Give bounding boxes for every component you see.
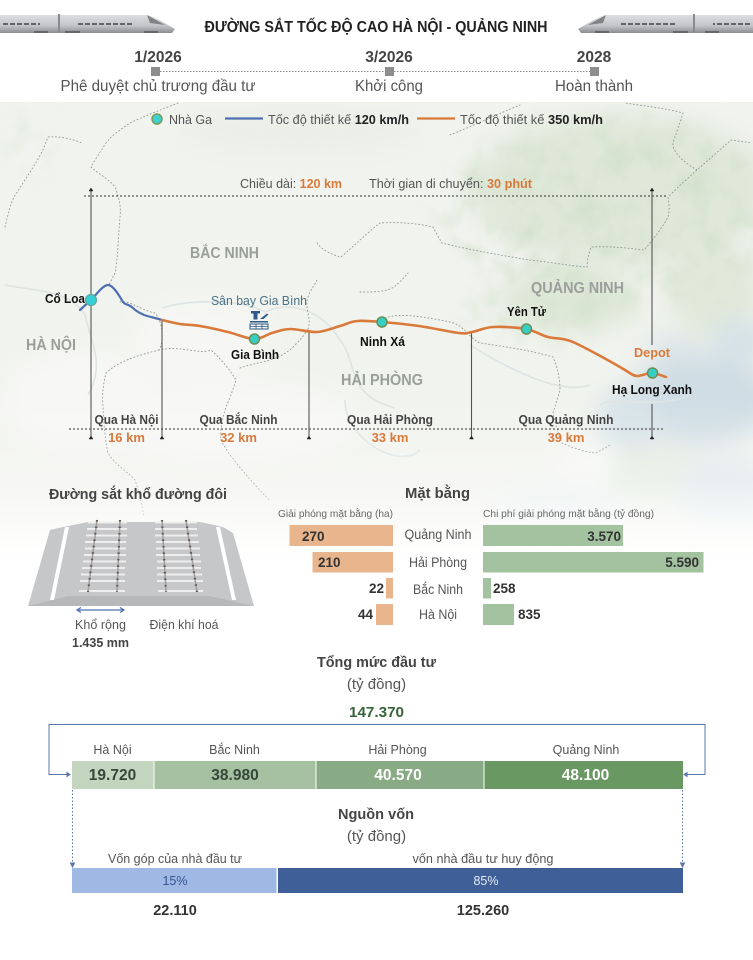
gauge annotation: Khổ rộng (75, 617, 126, 632)
legend: 350 km/h line: Tốc độ thiết kế 350 km/h (460, 113, 603, 127)
land clearance chart (ha): 44 (358, 607, 374, 622)
Quảng Ninh share (484, 743, 683, 789)
milestone 3/2026 (355, 49, 423, 95)
land heading: Mặt bằng (405, 484, 470, 502)
legend: station: Nhà Ga (169, 113, 212, 127)
length and travel time (240, 177, 533, 191)
segment: Hà Nội: Qua Hà Nội (94, 413, 158, 427)
segment: Quảng Ninh (518, 413, 614, 445)
Bắc Ninh share: 38.980 (211, 767, 259, 784)
funding heading: (tỷ đồng) (347, 828, 406, 845)
province labels: HÀ NỘI (26, 336, 76, 354)
dimension lines (69, 188, 666, 439)
milestone 3/2026: Khởi công (355, 78, 423, 95)
station: Yên Tử (507, 305, 547, 334)
timeline (60, 49, 633, 95)
land clearance chart (ha): 22 (369, 581, 384, 596)
Hải Phòng share: 40.570 (374, 767, 422, 784)
icon: airport (250, 311, 268, 329)
milestone 1/2026 (60, 49, 256, 95)
Bắc Ninh share (154, 742, 316, 789)
chart province labels (404, 527, 472, 622)
rivers (5, 285, 690, 456)
route: 120 km/h section (80, 285, 162, 320)
length and travel time: Thời gian di chuyển: 30 phút (369, 177, 533, 191)
chart province labels: Hải Phòng (409, 555, 467, 570)
length and travel time: Chiều dài: 120 km (240, 177, 342, 191)
gauge annotation: 1.435 mm (72, 636, 129, 650)
station: Hạ Long Xanh and depot (612, 346, 692, 397)
title: ĐƯỜNG SẮT TỐC ĐỘ CAO HÀ NỘI - QUẢNG NINH (204, 18, 548, 36)
province labels: HẢI PHÒNG (341, 371, 423, 389)
land clearance chart (ha) (278, 507, 393, 625)
segment: Hải Phòng: Qua Hải Phòng (347, 413, 433, 427)
funding: mobilised capital: 125.260 (457, 903, 509, 919)
milestone 1/2026: Phê duyệt chủ trương đầu tư (60, 78, 256, 95)
station: Hạ Long Xanh and depot: Depot (634, 346, 671, 360)
segment labels (94, 412, 614, 445)
electrification label: Điện khí hoá (150, 617, 219, 632)
land clearance chart (ha): 270 (302, 529, 325, 544)
map background (0, 102, 753, 562)
funding: investor equity: Vốn góp của nhà đầu tư (108, 852, 242, 866)
station: Cổ Loa: Cổ Loa (45, 292, 86, 306)
station: Ninh Xá (360, 317, 405, 349)
station: Ninh Xá: Ninh Xá (360, 335, 405, 349)
segment: Hà Nội (94, 413, 158, 445)
land cost chart (billion dong): 835 (518, 607, 541, 622)
legend (152, 113, 603, 127)
milestone 2028: Hoàn thành (555, 78, 633, 95)
total investment heading: Tổng mức đầu tư (317, 655, 436, 671)
arrow: gauge width (77, 608, 124, 612)
bracket connector (49, 724, 705, 776)
Bắc Ninh share: Bắc Ninh (209, 742, 260, 757)
funding: mobilised capital (278, 852, 683, 919)
funding heading (338, 807, 414, 845)
province labels: BẮC NINH (190, 244, 259, 262)
station: Hạ Long Xanh and depot: Hạ Long Xanh (612, 383, 692, 397)
Hà Nội share: 19.720 (89, 767, 136, 784)
chart province labels: Hà Nội (419, 607, 457, 622)
Hải Phòng share (316, 743, 484, 789)
land clearance chart (ha): 210 (318, 555, 341, 570)
gauge annotation (72, 608, 129, 650)
Quảng Ninh share: 48.100 (562, 767, 609, 784)
left train illustration (0, 14, 175, 33)
segment: Bắc Ninh: 32 km (220, 430, 257, 445)
funding: investor equity: 15% (162, 874, 188, 888)
funding: investor equity (72, 852, 276, 919)
double track illustration (28, 520, 254, 606)
total investment heading: (tỷ đồng) (347, 676, 406, 693)
Quảng Ninh share: Quảng Ninh (553, 743, 619, 757)
Hải Phòng share: Hải Phòng (368, 743, 427, 757)
dotted connector arrows (70, 790, 684, 867)
route: 350 km/h section (162, 320, 666, 377)
province labels (26, 244, 624, 389)
chart province labels: Quảng Ninh (404, 527, 472, 542)
station: Gia Bình: Gia Bình (231, 348, 279, 362)
province borders (5, 103, 752, 517)
funding heading: Nguồn vốn (338, 807, 414, 823)
segment: Hải Phòng (347, 413, 433, 445)
double track heading: Đường sắt khổ đường đôi (49, 485, 227, 503)
total investment heading (317, 655, 436, 721)
land cost chart (billion dong): 5.590 (665, 555, 699, 570)
Hà Nội share: Hà Nội (93, 743, 132, 757)
Gia Bình airport label: Sân bay Gia Bình (211, 294, 307, 308)
funding: mobilised capital: vốn nhà đầu tư huy động (412, 852, 554, 866)
land cost chart (billion dong): 258 (493, 581, 516, 596)
station: Gia Bình (231, 334, 279, 362)
segment: Quảng Ninh: 39 km (548, 430, 584, 445)
land cost chart (billion dong) (483, 507, 704, 625)
right train illustration (578, 14, 753, 33)
segment: Bắc Ninh: Qua Bắc Ninh (200, 412, 278, 427)
total investment heading: 147.370 (349, 704, 404, 721)
segment: Hải Phòng: 33 km (372, 430, 408, 445)
funding: investor equity: 22.110 (153, 903, 197, 919)
funding: mobilised capital: 85% (473, 874, 499, 888)
milestone 2028: 2028 (577, 49, 612, 66)
land cost chart (billion dong): Chi phí giải phóng mặt bằng (tỷ đồng) (483, 507, 654, 520)
investment by province (72, 742, 683, 789)
milestone 3/2026: 3/2026 (365, 49, 413, 66)
land cost chart (billion dong): 3.570 (587, 529, 621, 544)
segment: Quảng Ninh: Qua Quảng Ninh (518, 413, 614, 427)
segment: Bắc Ninh (200, 412, 278, 445)
Hà Nội share (72, 743, 154, 789)
stations (45, 292, 692, 397)
chart province labels: Bắc Ninh (413, 582, 463, 597)
segment: Hà Nội: 16 km (108, 430, 145, 445)
milestone 1/2026: 1/2026 (134, 49, 182, 66)
legend: 120 km/h line: Tốc độ thiết kế 120 km/h (268, 113, 409, 127)
land clearance chart (ha): Giải phóng mặt bằng (ha) (278, 507, 393, 520)
milestone 2028 (555, 49, 633, 95)
station: Yên Tử: Yên Tử (507, 305, 547, 319)
province labels: QUẢNG NINH (531, 280, 624, 297)
